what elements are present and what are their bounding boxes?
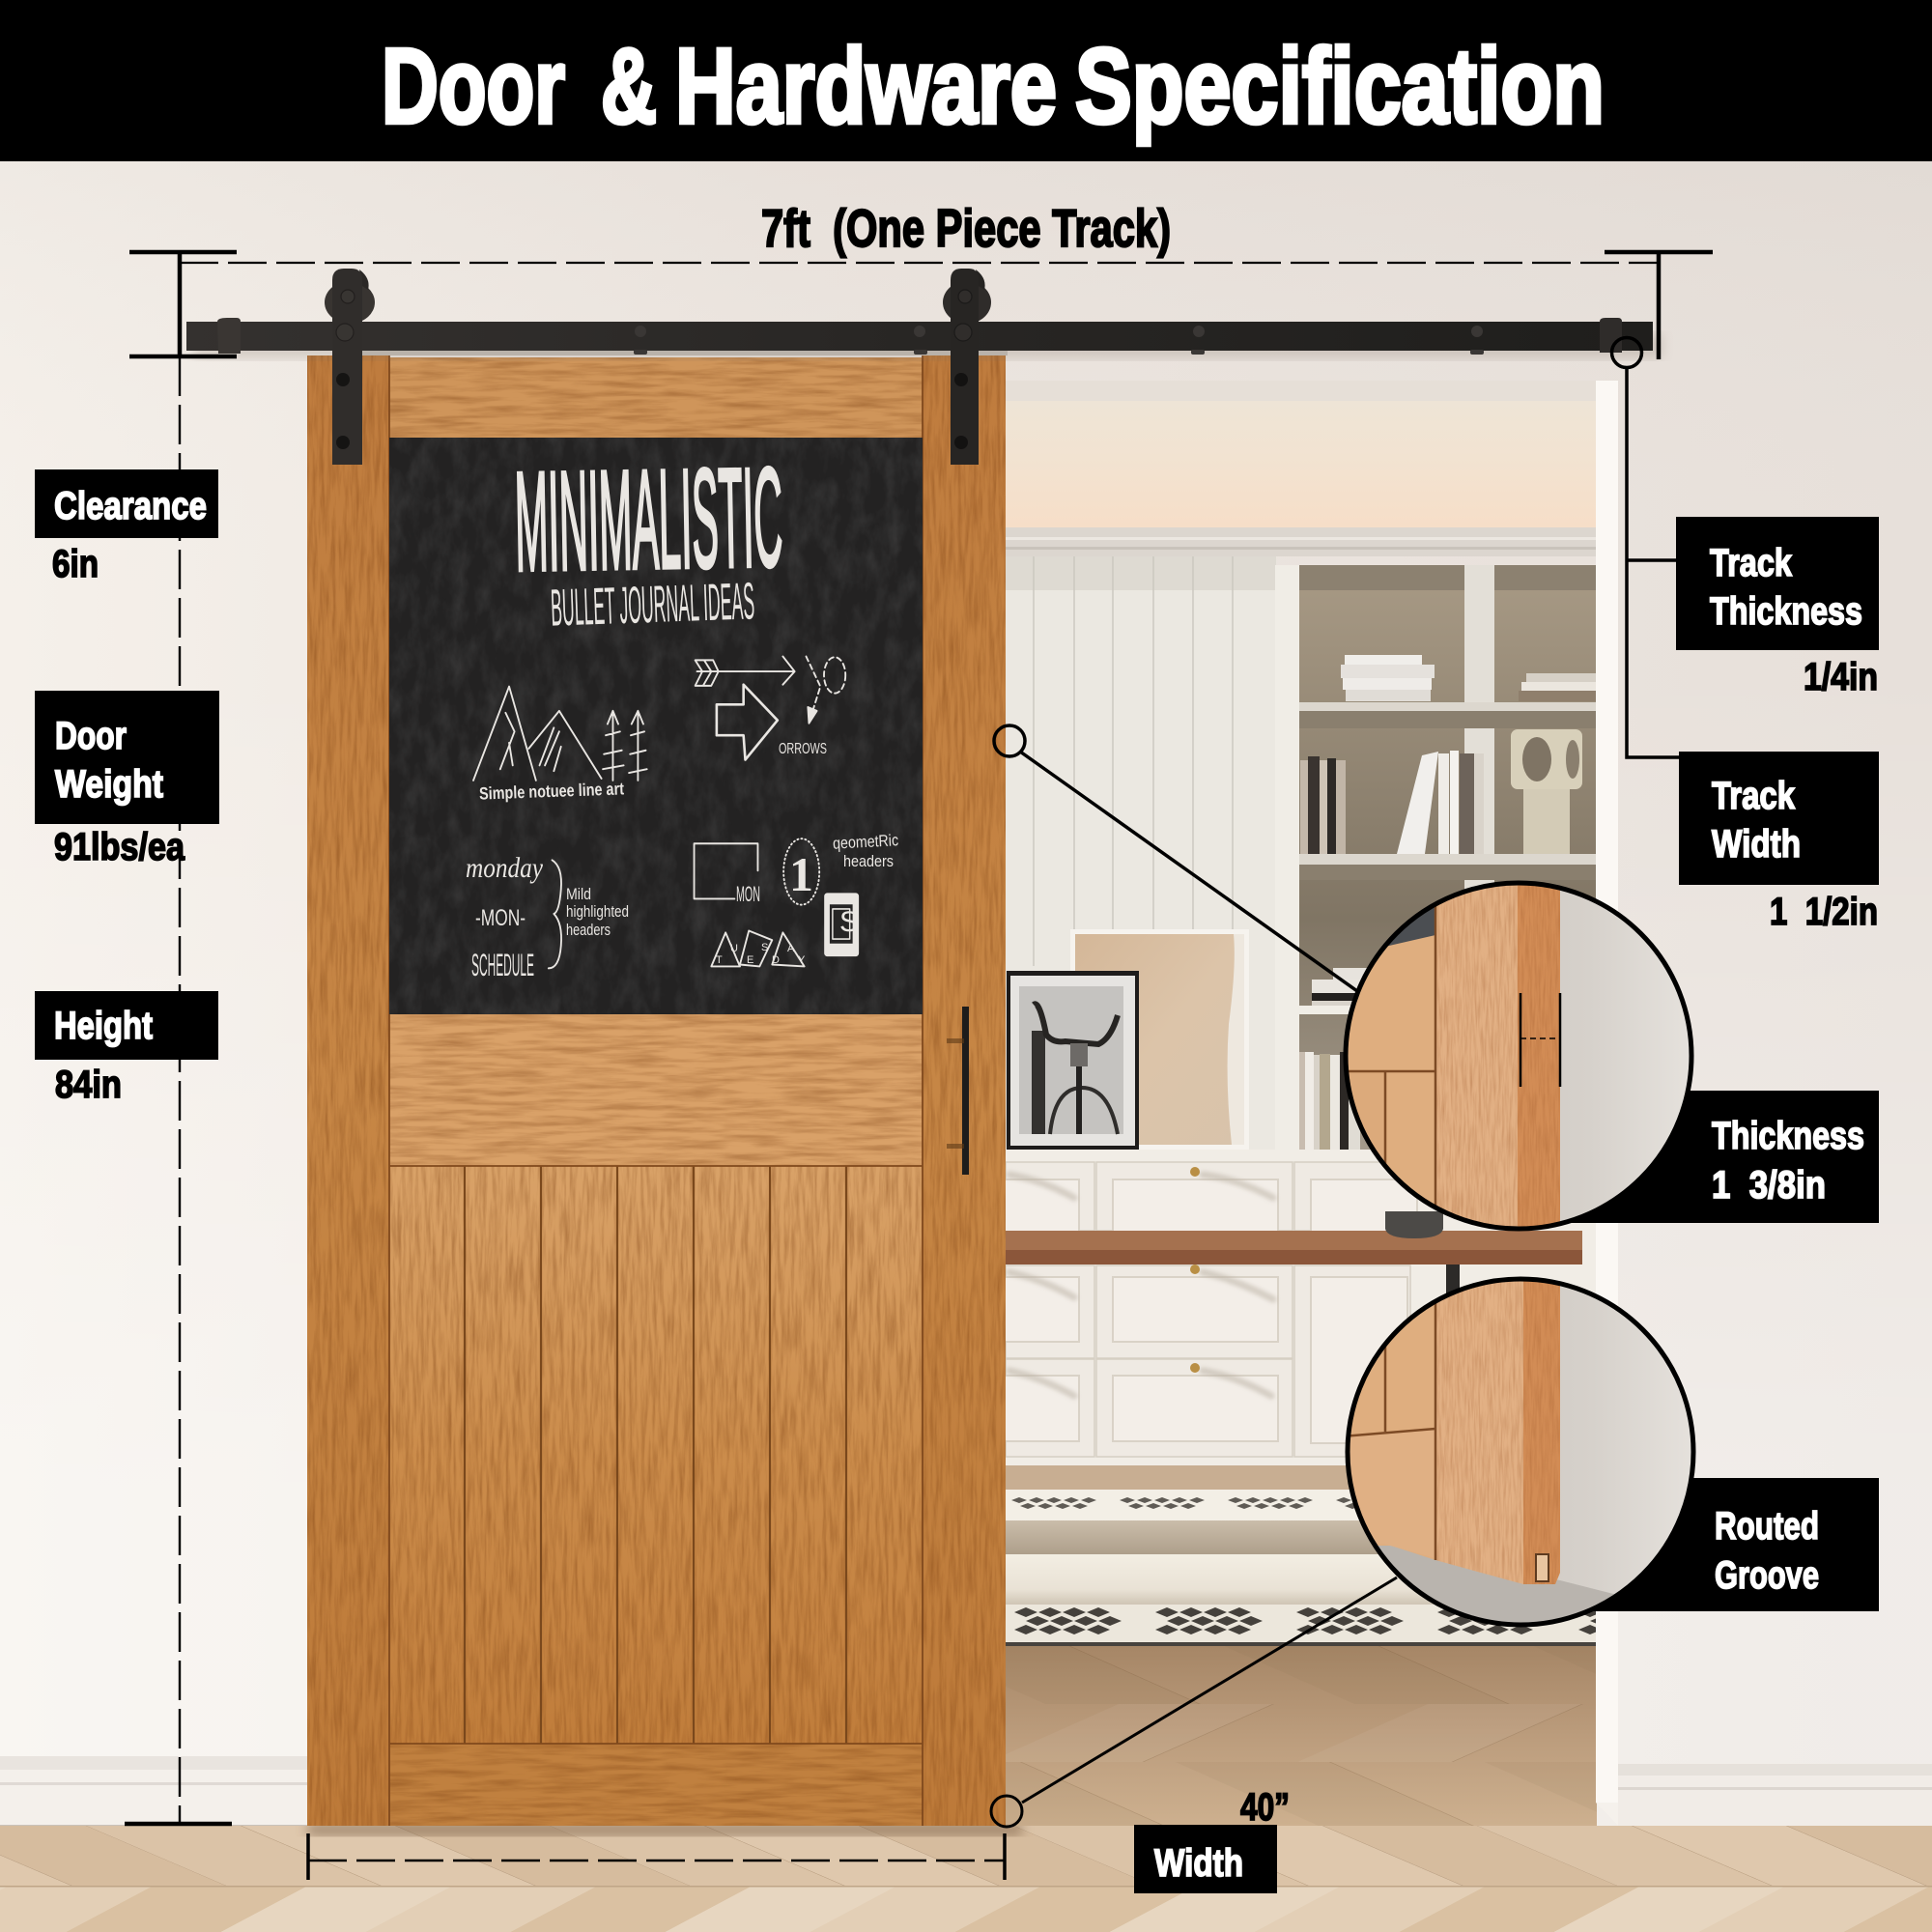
bottom rail <box>389 1744 923 1826</box>
chalk bunting letters: Y <box>798 954 806 966</box>
rug <box>1006 1490 1597 1646</box>
text: MINIMALISTIC <box>514 439 783 600</box>
label: track thickness <box>1676 517 1879 698</box>
label: clearance <box>35 469 218 585</box>
chalk bunting letters: U <box>730 943 738 954</box>
bike photo frame <box>1007 971 1139 1150</box>
value: height: 84in <box>55 1064 122 1106</box>
label: track width: Width <box>1712 823 1801 866</box>
hanger right <box>943 269 991 465</box>
door corner wood <box>1343 1280 1560 1584</box>
panelled wall <box>1006 556 1276 966</box>
chalk bunting letters <box>716 942 806 966</box>
mountains and trees <box>473 687 647 781</box>
label: thickness: Thickness <box>1712 1115 1864 1157</box>
chalk small text: SCHEDULE <box>471 948 534 982</box>
base cabinets <box>1006 1150 1418 1458</box>
rail joints <box>389 355 923 1826</box>
chalk bunting letters: S <box>761 942 768 953</box>
track bar <box>186 322 1653 351</box>
value: track thickness: 1/4in <box>1804 656 1878 698</box>
chalkboard panel: BULLET JOURNAL IDEAS <box>550 572 755 638</box>
label: door weight: Door <box>55 715 127 757</box>
interior room scene <box>1005 381 1597 1826</box>
chalk bunting letters: A <box>787 943 795 954</box>
chalk small text: ORROWS <box>779 741 827 757</box>
right stile <box>923 355 1006 1826</box>
title: & <box>601 27 657 146</box>
title: Hardware <box>675 27 1057 146</box>
label: thickness: 1 3/8in <box>1712 1164 1826 1207</box>
track shadow <box>193 333 1662 358</box>
door floor shadow <box>307 1824 1022 1835</box>
connector: thickness callout <box>994 725 1357 991</box>
chalk bunting letters: E <box>747 954 753 966</box>
label: track thickness: Thickness <box>1710 590 1862 633</box>
chalk bunting letters: T <box>716 954 723 966</box>
thickness marks <box>1520 993 1560 1087</box>
brace <box>549 860 561 968</box>
bowl <box>1385 1211 1443 1238</box>
chalk small text: qeometRic <box>833 831 899 853</box>
table <box>1006 1231 1582 1293</box>
label: routed groove <box>1565 1478 1879 1611</box>
title: Door <box>382 27 565 146</box>
chalk small text: highlighted <box>566 902 629 921</box>
right baseboard <box>1618 1764 1932 1826</box>
label: width: Width <box>1154 1842 1243 1885</box>
soffit <box>1006 381 1597 401</box>
label: height: Height <box>54 1005 153 1047</box>
door face panels <box>1343 935 1435 1071</box>
label: height <box>35 991 218 1106</box>
label: clearance: Clearance <box>54 485 207 527</box>
geometric headers drawings <box>695 838 858 966</box>
chalk doodles <box>473 657 858 968</box>
label: door weight <box>35 691 219 868</box>
door casing <box>1596 381 1618 1826</box>
middle rail <box>389 1014 923 1166</box>
chalkboard panel <box>389 438 923 1014</box>
connector: routed groove callout <box>991 1577 1397 1827</box>
label: track length: 7ft (One Piece Track) <box>761 198 1171 258</box>
hanger left <box>325 269 375 465</box>
dimension: door width <box>308 1833 1005 1880</box>
sculpture <box>1511 729 1582 854</box>
right stopper <box>1600 318 1622 353</box>
header band <box>0 0 1932 161</box>
inner floor strip <box>1006 1465 1350 1490</box>
label: routed groove: Routed <box>1715 1505 1819 1548</box>
art poster <box>1070 929 1249 1150</box>
connector: track callouts <box>1611 338 1679 757</box>
chalk small text: Mild <box>566 885 591 903</box>
track bolts <box>634 326 1484 355</box>
crown moulding <box>1006 527 1597 556</box>
label: routed groove: Groove <box>1715 1554 1819 1597</box>
title <box>382 27 1605 146</box>
door edge <box>1518 879 1560 1236</box>
dimension: track length <box>129 198 1713 359</box>
label: track thickness: Track <box>1710 542 1793 584</box>
left stopper <box>217 318 241 354</box>
chalk small text: monday <box>466 852 544 884</box>
detail lens: door thickness <box>1343 879 1695 1236</box>
dimension: door height <box>125 356 232 1824</box>
plank panel <box>389 1166 923 1744</box>
chalk small text: -MON- <box>475 905 526 931</box>
chalk small text: Simple notuee line art <box>479 779 624 804</box>
chalk small text: MON <box>736 882 760 906</box>
detail lens: routed groove <box>1343 1275 1700 1642</box>
books on shelf <box>1299 655 1597 1150</box>
chalk small text: headers <box>566 921 611 939</box>
arrows <box>696 657 845 759</box>
plank grooves <box>465 1166 846 1744</box>
floor <box>0 1826 1932 1932</box>
chalk bunting letters: D <box>772 954 780 966</box>
label: track width: Track <box>1712 775 1796 817</box>
door handle <box>947 1007 969 1175</box>
label: thickness <box>1546 1091 1879 1223</box>
left stile <box>307 355 389 1826</box>
bookshelf <box>1275 565 1597 1154</box>
value: clearance: 6in <box>52 543 99 585</box>
herringbone floor <box>1006 1646 1597 1826</box>
barn door <box>307 355 1006 1826</box>
groove notch <box>1536 1554 1548 1581</box>
left baseboard <box>0 1756 307 1826</box>
value: door weight: 91lbs/ea <box>54 826 185 868</box>
chalk small text: S <box>839 906 859 938</box>
barn door track <box>186 318 1662 358</box>
label: width <box>1134 1786 1290 1893</box>
chalk small text: 1 <box>789 847 813 901</box>
chalk small text <box>466 741 899 982</box>
top rail <box>389 357 923 438</box>
title: Specification <box>1075 27 1605 146</box>
label: door weight: Weight <box>55 763 163 806</box>
value: width: 40” <box>1240 1786 1290 1829</box>
ceiling glow <box>1006 401 1597 527</box>
value: track width: 1 1/2in <box>1770 891 1878 933</box>
chalk small text: headers <box>843 852 894 870</box>
label: track width <box>1679 752 1879 933</box>
